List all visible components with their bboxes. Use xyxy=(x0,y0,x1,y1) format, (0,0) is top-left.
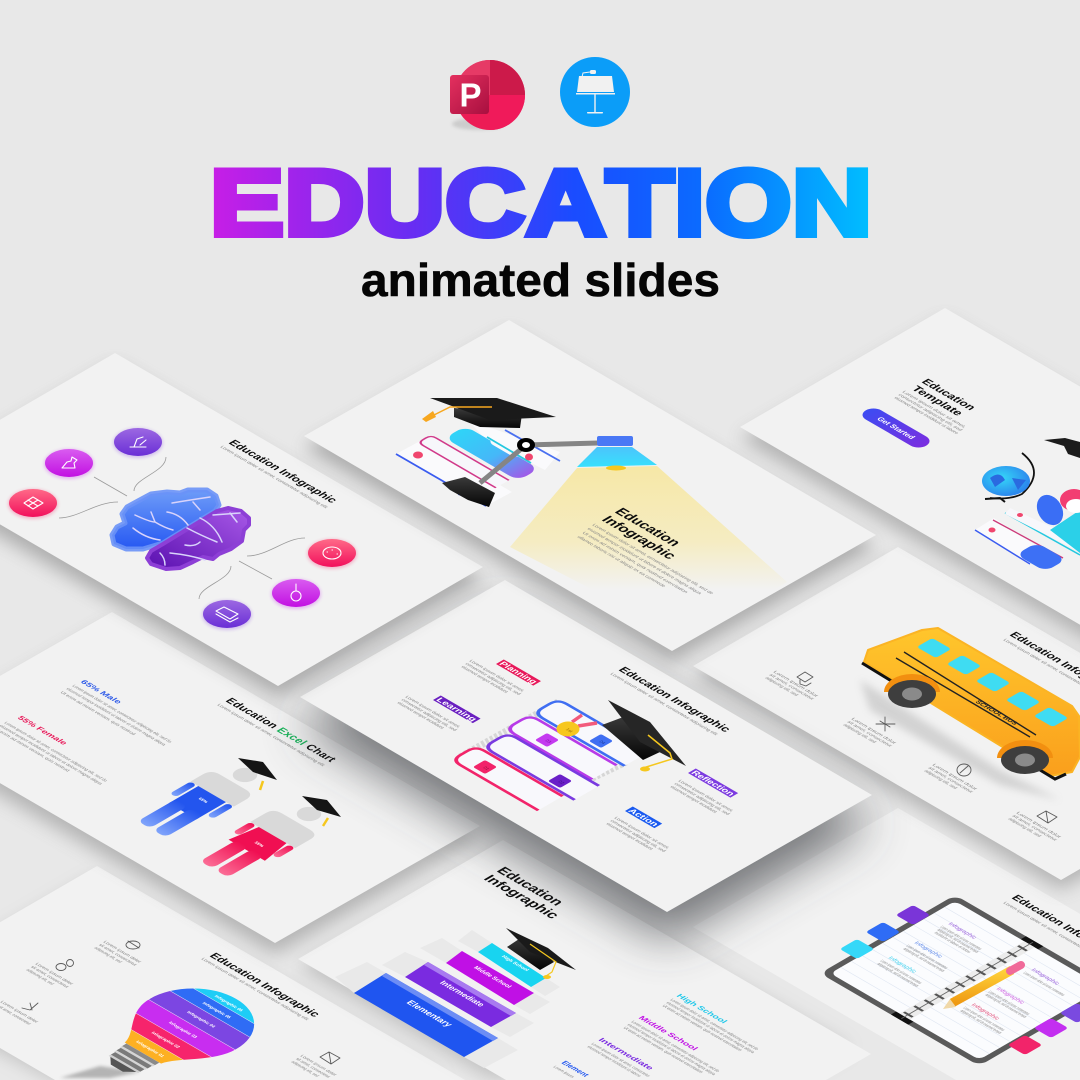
bus shadow xyxy=(860,680,1060,800)
icon: globe xyxy=(982,453,1034,502)
female figure chart xyxy=(191,796,341,882)
male label: eiusmod tempor incididunt ut labore et dolore magna aliqua xyxy=(65,687,168,747)
text block: Lorem ipsum dolor sit amet, xyxy=(901,390,968,429)
icon: Keynote logo xyxy=(560,57,630,127)
notebook text: adipiscing elit, sed do eiusmod tempor xyxy=(902,947,946,973)
pencil xyxy=(943,965,1021,1009)
infographic bulb: Infographic 05 xyxy=(201,1001,233,1019)
text: Learning: eiusmod tempor incididunt xyxy=(396,701,446,730)
text: levels: Ut enim ad minim veniam, quis nostrud exercitation xyxy=(661,1004,744,1052)
icons and text notes: Lorem ipsum dolor xyxy=(34,962,75,986)
stairs chart: High School xyxy=(500,955,531,973)
icons and text notes: Lorem ipsum dolor xyxy=(1015,811,1063,839)
notebook text: Infographic xyxy=(994,987,1025,1005)
text: levels: Middle School xyxy=(636,1014,700,1052)
panel: books slide xyxy=(300,580,872,940)
notebook text: adipiscing elit, sed do eiusmod tempor xyxy=(876,962,920,988)
slide title: Education xyxy=(918,377,978,412)
icons and text notes xyxy=(0,940,340,1079)
notebook tabs xyxy=(840,905,1080,1055)
books chart xyxy=(452,699,649,810)
infographic bulb: Infographic 03 xyxy=(168,1021,199,1039)
icons and text notes: Lorem ipsum dolor xyxy=(772,670,820,698)
slide title: Template xyxy=(908,384,965,418)
slide title: Education xyxy=(611,505,685,548)
male label: 65% Male xyxy=(78,678,124,705)
icons and text notes: sit amet, consectetur xyxy=(98,943,139,967)
notebook text: Lorem ipsum dolor sit amet, consectetur xyxy=(879,959,923,985)
text: Action: Lorem ipsum dolor sit amet, xyxy=(613,816,671,850)
notebook text: incididunt ut labore et dolore xyxy=(933,931,972,954)
icon: graduation cap xyxy=(1044,438,1080,458)
icons and text notes: Lorem ipsum dolor xyxy=(299,1054,338,1077)
icon button: microscope xyxy=(113,428,163,458)
text: Planning: consectetur adipiscing elit, sed xyxy=(464,662,522,696)
text: Action: eiusmod tempor incididunt xyxy=(605,822,655,851)
icons and text notes: adipiscing elit, sed xyxy=(842,723,878,744)
text: levels: Element xyxy=(559,1059,592,1078)
desk lamp xyxy=(442,436,657,507)
notebook text: Lorem ipsum dolor sit amet, consectetur xyxy=(905,944,949,970)
tag: Planning: Planning xyxy=(497,660,540,685)
notebook text: Infographic xyxy=(1029,968,1060,986)
slide title: Education Infographic xyxy=(206,951,322,1019)
books chart: 04 xyxy=(598,740,607,745)
icons and text notes: sit amet, consectetur xyxy=(846,720,894,748)
stairs chart: Intermediate xyxy=(438,980,487,1008)
slide title: Infographic xyxy=(598,513,681,561)
icons and text notes: Lorem ipsum dolor xyxy=(102,940,143,964)
icons and text notes: Lorem ipsum dolor xyxy=(850,717,898,745)
subtitle: animated slides xyxy=(361,254,720,306)
button: Get Started xyxy=(875,416,918,441)
tag: Action xyxy=(625,806,663,828)
icon: PowerPoint logo: P xyxy=(460,76,482,114)
tag: Learning xyxy=(433,695,481,723)
slide subtitle: Lorem ipsum dolor sit amet, consectetur adipiscing elit xyxy=(216,703,327,767)
icon button: guitar xyxy=(271,579,321,609)
text: levels: Lorem ipsum dolor sit amet, consectetur adipiscing elit, sed do xyxy=(669,998,760,1051)
infographic bulb: Infographic 06 xyxy=(213,994,245,1012)
text block: eiusmod tempor incididunt ut labore et dolore magna aliqua xyxy=(586,527,703,595)
tag: Learning: Learning xyxy=(434,696,480,723)
icons and text notes: adipiscing elit, sed xyxy=(923,769,959,790)
slide subtitle: Lorem ipsum dolor sit amet, consectetur adipiscing elit xyxy=(609,672,720,736)
school bus xyxy=(862,628,1080,779)
text: levels: Intermediate xyxy=(596,1036,656,1071)
icons and text notes: adipiscing elit, sed xyxy=(1007,817,1043,838)
icons and text notes: adipiscing elit, sed xyxy=(93,946,124,964)
male figure chart xyxy=(130,757,277,842)
icon: graduation cap xyxy=(602,700,686,772)
text: Planning: eiusmod tempor incididunt xyxy=(460,665,510,694)
icons and text notes: sit amet, consectetur xyxy=(30,965,71,989)
text: Learning: Lorem ipsum dolor sit amet, xyxy=(404,695,462,729)
button xyxy=(858,406,934,450)
icons and text notes: Lorem ipsum dolor xyxy=(0,1000,40,1024)
icons and text notes: adipiscing elit, sed xyxy=(25,968,56,986)
text: Reflection: eiusmod tempor incididunt xyxy=(669,785,719,814)
panel: bulb slide xyxy=(0,866,465,1080)
male label: Ut enim ad minim veniam, quis nostrud xyxy=(59,690,137,736)
notebook text: Infographic xyxy=(946,922,977,940)
male figure chart: 65% xyxy=(197,797,209,804)
text block: ullamco laboris nisi ut aliquip ex ea commodo xyxy=(576,535,667,588)
icons and text notes xyxy=(764,670,1063,842)
stairs chart xyxy=(335,930,560,1068)
icons and text notes: sit amet, consectetur xyxy=(927,766,975,794)
panel: template slide xyxy=(740,308,1080,653)
notebook text: adipiscing elit, sed do eiusmod tempor xyxy=(936,928,980,954)
icon button: palette xyxy=(307,539,357,569)
doodles xyxy=(460,702,626,804)
text: levels: eiusmod tempor incididunt ut labore et dolore magna aliqua xyxy=(665,1001,756,1054)
books chart: 01 xyxy=(482,766,491,771)
text block: consectetur adipiscing elit, sed xyxy=(897,393,964,432)
text: levels: High School xyxy=(674,992,730,1025)
notebook text: adipiscing elit, sed do eiusmod tempor xyxy=(984,993,1028,1019)
notebook text: Infographic xyxy=(969,1003,1000,1021)
icon: medal xyxy=(556,715,597,736)
female label: eiusmod tempor incididunt ut labore et dolore magna aliqua xyxy=(0,724,104,786)
text: Reflection: consectetur adipiscing elit, sed xyxy=(673,782,731,816)
slide title: Education xyxy=(493,864,568,908)
icon: graduation cap xyxy=(506,928,576,979)
panel: brain slide xyxy=(0,353,483,698)
female label: 55% Female xyxy=(15,714,70,746)
notebook text: Lorem ipsum dolor sit amet, consectetur xyxy=(962,1006,1006,1032)
slide title xyxy=(908,377,978,418)
infographic bulb: Infographic 02 xyxy=(150,1031,182,1049)
connector lines xyxy=(59,457,305,599)
slide subtitle: Lorem ipsum dolor sit amet, consectetur adipiscing elit xyxy=(219,445,330,509)
books chart: 02 xyxy=(557,780,566,785)
icon: medal: 1st xyxy=(565,727,575,733)
notebook text: Infographic xyxy=(886,956,917,974)
books chart: 03 xyxy=(544,739,553,744)
title: EDUCATION xyxy=(210,150,872,255)
icons and text notes: sit amet, consectetur xyxy=(768,673,816,701)
text: levels: Ut enim ad minim veniam, quis nostrud exercitation xyxy=(622,1026,705,1074)
text block: Ut enim ad minim veniam, quis nostrud exercitation xyxy=(581,531,690,594)
text: levels xyxy=(552,992,760,1079)
tag: Reflection: Reflection xyxy=(689,769,737,797)
notebook text: Lorem ipsum dolor sit amet, consectetur xyxy=(939,925,983,951)
tag: Action: Action xyxy=(626,807,661,828)
icons and text notes: adipiscing elit, sed xyxy=(764,676,800,697)
icon button: books xyxy=(202,600,252,630)
books illustration xyxy=(975,489,1080,572)
infographic bulb: Infographic 04 xyxy=(186,1010,217,1028)
panel: lamp slide xyxy=(304,320,876,663)
icons and text notes: sit amet, consectetur xyxy=(1011,814,1059,842)
slide title: Education Infographic xyxy=(615,665,733,734)
brain illustration xyxy=(112,490,249,569)
panel: stairs slide xyxy=(298,840,871,1080)
text: Planning: Lorem ipsum dolor sit amet, xyxy=(468,659,526,693)
notebook text: Lorem ipsum dolor sit amet, consectetur xyxy=(987,990,1031,1016)
notebook text: Infographic xyxy=(912,941,943,959)
bulb shadow xyxy=(60,1066,140,1078)
infographic bulb: Infographic 01 xyxy=(135,1040,166,1058)
text block: eiusmod tempor incididunt ut labore xyxy=(893,396,960,435)
light beam xyxy=(510,466,787,640)
slide title: Infographic xyxy=(480,872,564,921)
panel: Excel chart slide xyxy=(0,612,480,955)
text: Action: consectetur adipiscing elit, sed xyxy=(609,819,667,853)
slide title: Education Excel Chart xyxy=(222,696,339,764)
female label: Lorem ipsum dolor sit amet, consectetur adipiscing elit, sed do xyxy=(3,721,109,783)
school bus: SCHOOL BUS xyxy=(973,700,1018,726)
notebook text xyxy=(876,922,1066,1035)
books illustration xyxy=(396,420,560,506)
notebook text: adipiscing elit, sed do eiusmod tempor xyxy=(959,1009,1003,1035)
panel: notebook slide xyxy=(693,808,1080,1080)
notebook xyxy=(820,895,1080,1066)
icon: PowerPoint logo xyxy=(450,60,525,130)
icon button: flask xyxy=(44,449,94,479)
panel: bus slide xyxy=(693,547,1080,890)
icon button: building xyxy=(8,489,58,519)
infographic bulb xyxy=(108,988,254,1073)
female figure chart: 55% xyxy=(253,841,265,848)
icon: graduation cap xyxy=(422,398,556,428)
slide title: Education Infographic xyxy=(225,438,340,505)
text: Reflection: Lorem ipsum dolor sit amet, xyxy=(677,779,735,813)
icons and text notes: Lorem ipsum dolor xyxy=(931,763,979,791)
stairs chart: Middle School xyxy=(472,966,512,989)
stairs chart: Elementary xyxy=(404,999,455,1028)
text: Learning: consectetur adipiscing elit, sed xyxy=(400,698,458,732)
slide subtitle: Lorem ipsum dolor sit amet, consectetur adipiscing elit xyxy=(200,957,311,1021)
male label: Lorem ipsum dolor sit amet, consectetur adipiscing elit, sed do xyxy=(71,684,174,744)
text block: Lorem ipsum dolor sit amet, consectetur adipiscing elit, sed do xyxy=(591,523,715,595)
